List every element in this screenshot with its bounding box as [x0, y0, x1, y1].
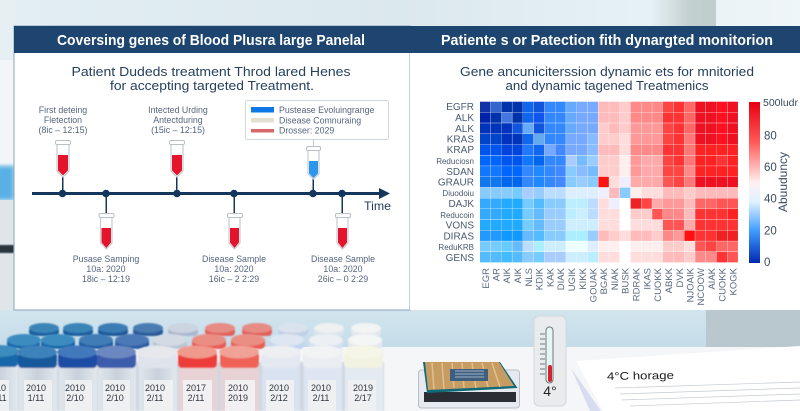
icon: blood tube 2	[170, 140, 184, 194]
heatmap column labels: UGIK	[567, 267, 578, 291]
vial date labels: 2019	[353, 383, 373, 393]
heading: timeline panel: Coversing genes of Blood Plusra large Panelal	[57, 32, 365, 49]
heatmap column labels: KIKK	[578, 267, 589, 290]
heatmap column labels: CUOKK	[718, 267, 728, 302]
panel: blood sampling timeline	[14, 26, 410, 310]
icon: blood tube 5	[336, 194, 350, 249]
heatmap column labels: NLS	[524, 268, 535, 286]
vial date labels: 1/11	[28, 393, 44, 403]
subtitle: heatmap panel	[460, 64, 754, 93]
heatmap column labels: AIAK	[707, 267, 718, 290]
vial date labels: 2010	[105, 383, 125, 393]
heading: heatmap panel: Patiente s or Patection fith dynargted monitorion	[441, 32, 773, 49]
heatmap column labels: CUOKK	[653, 267, 664, 302]
colour scale legend: 20	[764, 226, 777, 238]
label: first detection: Fletection	[44, 115, 82, 125]
icon: blue plasma tube	[306, 139, 320, 194]
icon: microchip on tray	[418, 362, 520, 408]
subtitle: timeline panel: Patient Dudeds treatment Throd lared Henes	[72, 64, 351, 79]
subtitle: timeline panel	[72, 64, 351, 93]
vial date labels: 2/12	[270, 393, 288, 403]
subtitle: timeline panel: for accepting targeted Treatment.	[110, 78, 314, 93]
vial date labels: 2/11	[188, 393, 204, 403]
vial date labels	[0, 380, 376, 411]
heatmap row labels: KRAS	[447, 134, 474, 146]
label: pusase sampling	[73, 254, 139, 284]
heatmap row labels: DAJK	[448, 199, 474, 210]
label: disease sample 2: 10a: 2020	[323, 264, 363, 274]
heatmap row labels: GENS	[446, 253, 474, 264]
heatmap row labels: VONS	[446, 220, 474, 232]
vial date labels: 2/10	[106, 393, 124, 403]
heatmap column labels: AIK	[513, 267, 524, 283]
heatmap row labels: Reduciosn	[436, 157, 474, 166]
heading: heatmap panel	[410, 26, 800, 53]
subtitle: heatmap panel: and dynamic tagened Treatmenics	[506, 78, 709, 93]
label: first detection: (8ic – 12:15)	[39, 125, 88, 135]
document: 4°C storage sheet	[571, 346, 800, 411]
colour scale legend: Abuuduncy	[776, 152, 790, 212]
heatmap row labels: Reducoin	[440, 211, 474, 220]
vial date labels: 2019	[228, 393, 248, 403]
icon: blood tube 3	[99, 194, 114, 249]
heatmap column labels: IKAS	[642, 268, 654, 290]
label: antecedent during: Intected Urding	[148, 105, 208, 115]
icon: thermometer at 4 degrees	[534, 316, 566, 406]
vial date labels: 2/11	[147, 393, 163, 403]
label: pusase sampling: Pusase Samping	[73, 254, 139, 264]
label: disease sample 1: 10a: 2020	[214, 264, 254, 274]
heatmap column labels	[481, 267, 740, 305]
colour scale legend: 0	[764, 257, 770, 269]
label: pusase sampling: 18ic – 12:19	[82, 274, 130, 284]
colour scale legend	[749, 98, 799, 269]
heatmap row labels	[436, 102, 474, 264]
heading: timeline panel	[14, 26, 410, 53]
heatmap row labels: Diuodoiu	[442, 189, 474, 198]
sample vials: middle row	[7, 334, 382, 349]
label: first detection: First deteing	[39, 105, 87, 115]
icon: thermometer at 4 degrees: 4°	[543, 383, 557, 399]
heatmap column labels: KAK	[546, 267, 556, 287]
colour scale legend: 500ludr	[763, 98, 799, 109]
heatmap column labels: KDIK	[534, 267, 546, 290]
heatmap row labels: KRAP	[447, 145, 474, 156]
label: disease sample 1	[202, 254, 266, 284]
colour scale legend: 60	[764, 162, 777, 174]
heatmap row labels: GRAUR	[438, 178, 474, 188]
heatmap column labels: RDRAK	[632, 267, 642, 301]
label: disease sample 1: 16ic – 2 2:29	[209, 274, 259, 284]
heatmap grid	[480, 102, 738, 262]
heatmap column labels: NCOOW	[696, 268, 707, 305]
vial date labels: 2/10	[66, 393, 84, 403]
vial date labels: 2/11	[313, 393, 329, 403]
vial date labels: 2010	[26, 383, 46, 393]
heatmap row labels: EGFR	[446, 102, 474, 113]
heatmap column labels: KOGK	[728, 267, 740, 295]
vial date labels: 2010	[311, 383, 331, 393]
label: antecedent during	[148, 105, 208, 135]
legend	[246, 100, 388, 140]
document: 4°C storage sheet: 4°C horage	[607, 370, 674, 383]
label: disease sample 1: Disease Sample	[202, 254, 266, 264]
heatmap column labels: BUSK	[620, 267, 632, 294]
icon: blood tube 1	[56, 140, 70, 194]
legend: Pustease Evoluingrange	[279, 105, 374, 115]
vial date labels: 2017	[186, 383, 206, 393]
heatmap column labels: AR	[492, 268, 502, 281]
timeline axis and arrow	[32, 188, 390, 199]
heatmap column labels: EGR	[481, 268, 492, 289]
label: pusase sampling: 10a: 2020	[86, 264, 126, 274]
label: first detection	[39, 105, 88, 135]
vial date labels: 2010	[65, 383, 85, 393]
heatmap row labels: ReduKRB	[438, 243, 474, 252]
sample vials: back row	[29, 323, 381, 336]
vial date labels: 2010	[269, 383, 289, 393]
heatmap column labels: NIAK	[610, 267, 621, 290]
heatmap row labels: ALK	[455, 124, 474, 135]
heatmap column labels: GOUAK	[588, 267, 600, 302]
icon: blood tube 4	[228, 194, 242, 249]
label: disease sample 2: Disease Sample	[311, 254, 375, 264]
colour scale legend: 80	[764, 130, 777, 142]
heatmap column labels: DIAK	[556, 267, 567, 290]
vial date labels: 2010	[145, 383, 165, 393]
heatmap row labels: DIRAS	[443, 232, 474, 242]
label: antecedent during: (15ic – 12:15)	[151, 125, 205, 135]
label: disease sample 2: 26ic – 0 2:29	[318, 274, 368, 284]
vial date labels: 2/17	[354, 393, 372, 403]
sample vials: front row	[0, 345, 384, 411]
label: antecedent during: Antectduring	[153, 115, 203, 125]
colour scale legend: 40	[764, 194, 777, 206]
axis label: time: Time	[364, 199, 391, 213]
vial date labels: 2010	[228, 383, 248, 393]
subtitle: heatmap panel: Gene ancuniciterssion dynamic ets for mnitoried	[460, 64, 754, 79]
heatmap column labels: NJOAIK	[686, 267, 696, 302]
heatmap column labels: ABKK	[664, 267, 675, 293]
heatmap column labels: AIK	[502, 267, 513, 283]
panel: gene abundance heatmap	[410, 26, 800, 310]
heatmap column labels: DVK	[675, 267, 686, 288]
heatmap column labels: BGAK	[599, 267, 610, 294]
heatmap row labels: ALK	[455, 113, 474, 124]
legend: Drosser: 2029	[279, 126, 334, 136]
legend: Disease Comnuraing	[279, 116, 361, 126]
heatmap row labels: SDAN	[446, 167, 474, 178]
label: disease sample 2	[311, 254, 375, 284]
